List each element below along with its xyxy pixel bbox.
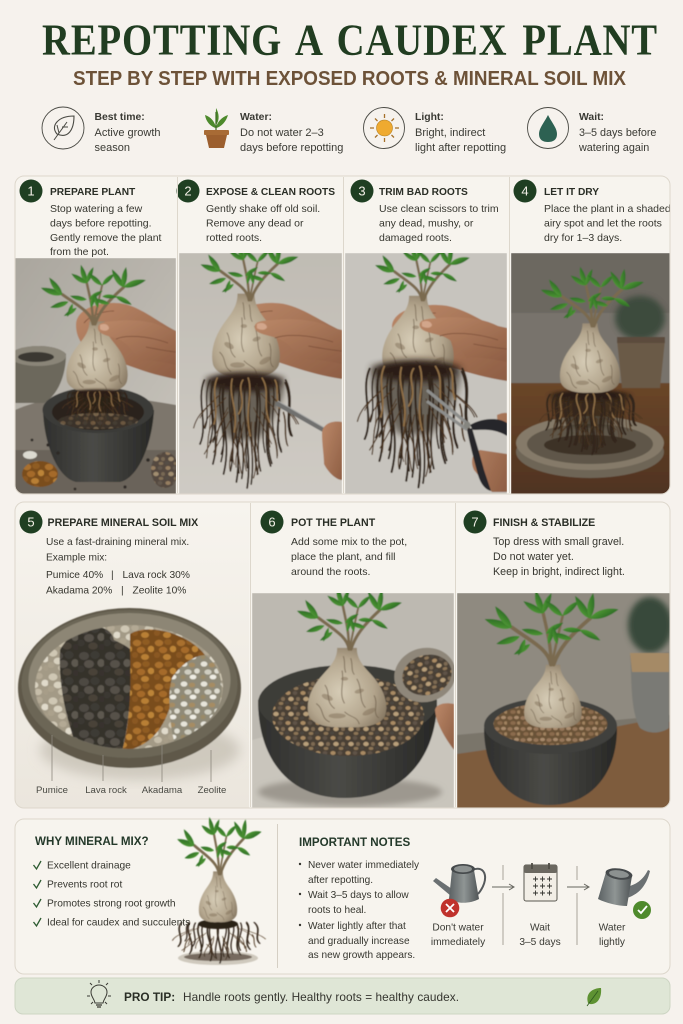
step 7 photo: [457, 589, 672, 808]
panel: why mineral mix and notes: [15, 816, 670, 974]
step 3 text: damaged roots.: [379, 232, 452, 244]
step 3 badge: 3: [358, 184, 366, 198]
step 1 text: Gently remove the plant: [50, 232, 162, 244]
important notes list: and gradually increase: [308, 936, 410, 947]
step 4 photo: [511, 253, 670, 494]
step 7 text: Keep in bright, indirect light.: [493, 566, 625, 578]
important notes list: as new growth appears.: [308, 950, 415, 961]
icon: watering can, water lightly: [598, 867, 651, 948]
icon: sun: [364, 108, 404, 148]
light text: Bright, indirect: [415, 127, 485, 139]
step 7 text: Do not water yet.: [493, 551, 574, 563]
step 3 photo: [345, 242, 507, 494]
wait text: Wait:: [579, 112, 604, 123]
why mineral mix checklist: Promotes strong root growth: [47, 898, 176, 910]
step 7 heading: FINISH & STABILIZE: [493, 517, 595, 529]
info strip: [42, 107, 656, 154]
step 5 text: |: [121, 586, 124, 596]
step 6 text: place the plant, and fill: [291, 551, 396, 563]
step 3: [345, 180, 507, 494]
step 5 badge: [20, 510, 42, 534]
step 5 text: Zeolite 10%: [132, 586, 186, 596]
step 4 badge: [514, 180, 536, 202]
step 1 text: days before repotting.: [50, 218, 152, 230]
icon: watering can, do not water: [431, 864, 486, 948]
step 1 text: from the pot.: [50, 246, 109, 258]
step 5 text: Use a fast-draining mineral mix.: [46, 537, 189, 548]
step 6: [252, 510, 462, 808]
step 2 heading: EXPOSE & CLEAN ROOTS: [206, 187, 335, 198]
step 4: [511, 180, 674, 494]
mix labels: Akadama: [142, 785, 183, 796]
icon: watering can, do not water: immediately: [431, 937, 486, 948]
arrow: to wait: [492, 884, 514, 890]
step 4 heading: LET IT DRY: [544, 187, 599, 198]
important notes heading: IMPORTANT NOTES: [299, 836, 410, 849]
step 3 heading: TRIM BAD ROOTS: [379, 187, 468, 198]
step 6 badge: [260, 510, 284, 534]
icon: light bulb: [87, 980, 111, 1007]
icon: leaf: [587, 988, 601, 1006]
panel: pro tip: [15, 978, 670, 1014]
important notes list: Wait 3–5 days to allow: [308, 890, 409, 901]
step 6 badge: 6: [268, 514, 276, 530]
step 1 badge: 1: [27, 184, 35, 198]
wait text: watering again: [578, 142, 649, 154]
step 1 badge: [20, 180, 42, 202]
subtitle: STEP BY STEP WITH EXPOSED ROOTS & MINERAL SOIL MIX: [73, 68, 627, 90]
important notes list: Never water immediately: [308, 860, 420, 871]
step 1 photo: [10, 258, 179, 494]
water text: days before repotting: [240, 142, 343, 154]
wait text: 3–5 days before: [579, 127, 656, 139]
water text: Water:: [240, 112, 272, 123]
icon: calendar, wait: Wait: [530, 922, 550, 934]
why mineral mix checklist: Prevents root rot: [47, 880, 122, 890]
step 2 text: Remove any dead or: [206, 218, 304, 230]
panel: steps 5 to 7: [15, 502, 672, 808]
step 2 photo: [179, 241, 342, 494]
mix labels: Lava rock: [85, 785, 127, 796]
icon: leaf in circle: [42, 107, 84, 149]
step 5 text: Lava rock 30%: [122, 570, 190, 581]
icon: potted seedling: [204, 108, 229, 148]
step 2 text: Gently shake off old soil.: [206, 203, 320, 215]
icon: watering can, water lightly: Water: [599, 922, 626, 934]
panel: pro tip: Handle roots gently. Healthy roots = healthy caudex.: [183, 990, 459, 1004]
step 3 text: Use clean scissors to trim: [379, 203, 499, 215]
best time text: Best time:: [94, 112, 145, 123]
step 7: [457, 510, 672, 808]
step 4 text: Place the plant in a shaded,: [544, 203, 674, 215]
best time text: season: [94, 142, 130, 154]
step 2 badge: 2: [184, 184, 192, 198]
step 4 text: airy spot and let the roots: [544, 218, 662, 230]
step 2 text: rotted roots.: [206, 232, 262, 244]
important notes list: roots to heal.: [308, 905, 366, 916]
step 7 text: Top dress with small gravel.: [493, 536, 624, 548]
important notes list: [299, 860, 420, 961]
step 1: [10, 180, 179, 494]
step 5: [15, 502, 249, 808]
panel: steps 1 to 4: [10, 176, 674, 494]
step 2 badge: [176, 180, 200, 202]
why mineral mix checklist: Excellent drainage: [47, 860, 131, 872]
step 6 heading: POT THE PLANT: [291, 517, 376, 529]
plant illustration with roots: [172, 816, 266, 965]
step 4 badge: 4: [521, 184, 529, 198]
step 5 text: Akadama 20%: [46, 586, 112, 596]
step 5 heading: PREPARE MINERAL SOIL MIX: [48, 517, 198, 529]
why mineral mix heading: WHY MINERAL MIX?: [35, 835, 149, 848]
step 5 badge: 5: [27, 514, 35, 530]
icon: calendar, wait: [519, 863, 561, 948]
icon: watering can, water lightly: lightly: [599, 937, 626, 948]
step 5 text: Example mix:: [46, 552, 107, 564]
water text: Do not water 2–3: [240, 127, 324, 139]
light text: light after repotting: [415, 142, 506, 154]
step 7 badge: [464, 510, 486, 534]
step 1 text: Stop watering a few: [50, 203, 143, 215]
step 3 text: any dead, mushy, or: [379, 218, 474, 230]
mix labels: Pumice: [36, 785, 68, 796]
icon: water drop: [528, 108, 568, 148]
step 2: [176, 180, 342, 494]
step 7 badge: 7: [471, 514, 479, 530]
mix labels: [36, 735, 226, 796]
step 1 heading: PREPARE PLANT: [50, 187, 136, 198]
icon: watering can, do not water: Don't water: [432, 922, 484, 934]
step 5 text: |: [111, 570, 114, 581]
step 4 text: dry for 1–3 days.: [544, 232, 622, 244]
step 6 text: around the roots.: [291, 566, 370, 578]
important notes list: Water lightly after that: [308, 921, 406, 932]
step 3 badge: [350, 180, 374, 202]
why mineral mix checklist: [34, 860, 190, 928]
why mineral mix checklist: Ideal for caudex and succulents: [47, 918, 190, 928]
step 6 photo: [252, 586, 462, 808]
mix labels: Zeolite: [198, 785, 226, 796]
pro tip text: PRO TIP:: [124, 990, 175, 1004]
bowl of mineral mix: [18, 608, 241, 780]
important notes list: after repotting.: [308, 875, 373, 886]
best time text: Active growth: [94, 127, 161, 139]
icon: calendar, wait: 3–5 days: [519, 937, 561, 948]
step 6 text: Add some mix to the pot,: [291, 536, 407, 548]
arrow: to water: [567, 884, 589, 890]
light text: Light:: [415, 112, 444, 123]
step 5 text: Pumice 40%: [46, 570, 103, 581]
